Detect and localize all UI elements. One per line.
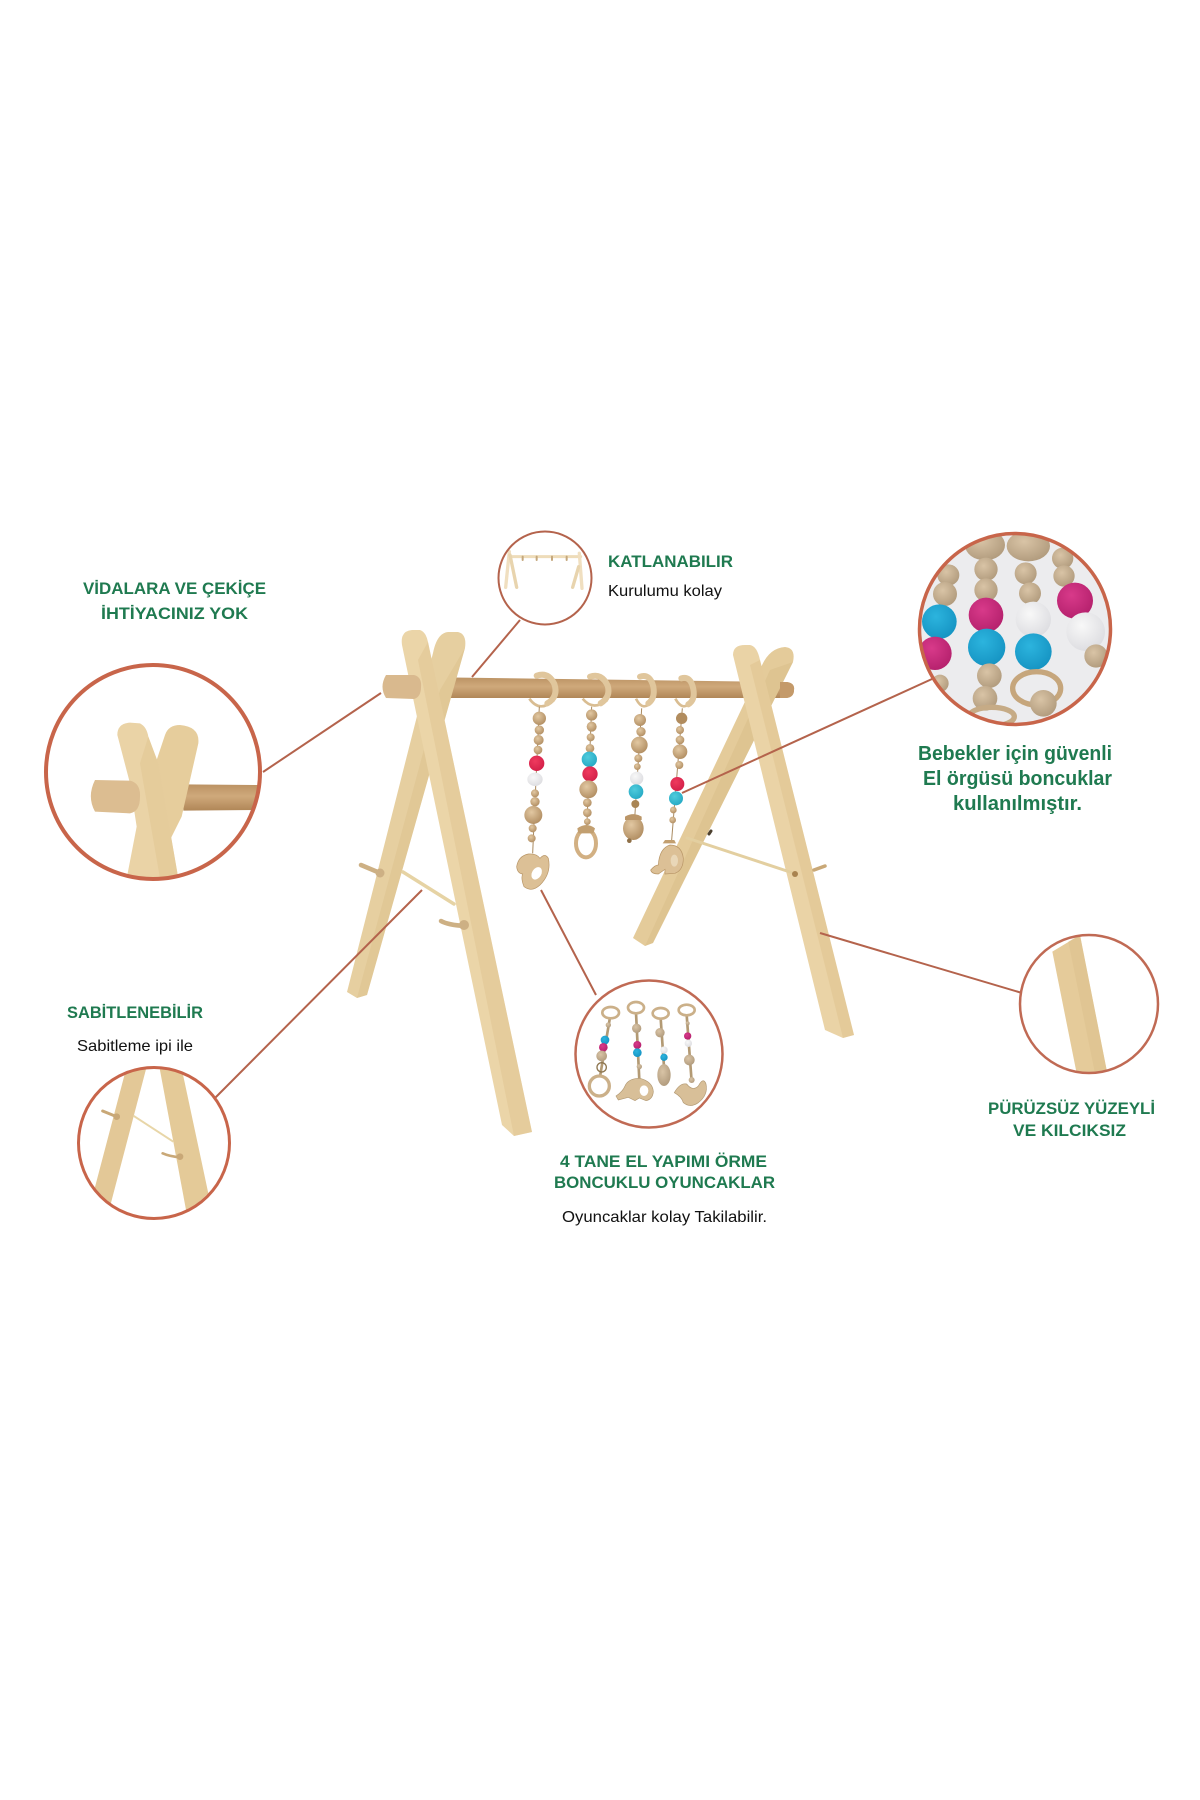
right A-frame back leg (633, 647, 794, 946)
wooden rod (415, 677, 794, 698)
right A-frame front leg (733, 645, 854, 1038)
circle: bead close-up (913, 530, 1120, 730)
leader lines (213, 620, 1022, 1100)
heading: safe beads: kullanılmıştır. (953, 793, 1082, 815)
baby gym product (347, 630, 854, 1136)
callout: handmade toys (554, 980, 775, 1226)
ring fronts (537, 675, 694, 704)
heading: safe beads: El örgüsü boncuklar (923, 768, 1112, 790)
toy strand 4 (651, 708, 687, 874)
heading: no screws: VİDALARA VE ÇEKİÇE (83, 579, 266, 598)
rod left end (382, 675, 421, 699)
rod right end (780, 682, 794, 698)
callout: foldable (498, 532, 733, 624)
line: foldable (472, 620, 520, 677)
heading: no screws: İHTİYACINIZ YOK (101, 604, 249, 623)
callout: fixable (67, 1003, 230, 1219)
left A-frame front leg (402, 630, 532, 1136)
heading: foldable: KATLANABILIR (608, 552, 733, 571)
callout: no screws (45, 579, 271, 880)
rope: left stabiliser (361, 865, 469, 930)
heading: smooth surface: PÜRÜZSÜZ YÜZEYLİ (988, 1099, 1155, 1118)
caption: toys: Oyuncaklar kolay Takilabilir. (562, 1209, 767, 1226)
rope: right stabiliser (687, 831, 825, 877)
heading: handmade toys: BONCUKLU OYUNCAKLAR (554, 1173, 775, 1192)
toy strand 3 (623, 708, 648, 843)
caption: foldable: Kurulumu kolay (608, 583, 722, 600)
callout: safe beads (913, 530, 1120, 815)
circle: folded gym (498, 532, 592, 624)
left A-frame back leg (347, 632, 465, 998)
heading: fixable: SABİTLENEBİLİR (67, 1003, 203, 1022)
caption: fixable: Sabitleme ipi ile (77, 1038, 193, 1055)
hanging toys (517, 675, 694, 889)
line: toys (541, 890, 596, 995)
line: stabiliser (213, 890, 422, 1100)
callout: smooth surface (988, 935, 1160, 1140)
rings behind the rod (529, 699, 693, 706)
heading: handmade toys: 4 TANE EL YAPIMI ÖRME (560, 1152, 767, 1171)
circle: leg surface (1020, 935, 1158, 1073)
circle: four toys (575, 980, 723, 1128)
toy strand 2 (576, 707, 598, 857)
line: joint (263, 693, 381, 772)
toy strand 1 (517, 707, 549, 889)
heading: smooth surface: VE KILCIKSIZ (1013, 1121, 1126, 1140)
line: surface (820, 933, 1022, 993)
circle: rope detail (78, 1067, 230, 1219)
heading: safe beads: Bebekler için güvenli (918, 743, 1112, 765)
line: beads (682, 679, 932, 793)
circle: joint detail (45, 664, 261, 880)
